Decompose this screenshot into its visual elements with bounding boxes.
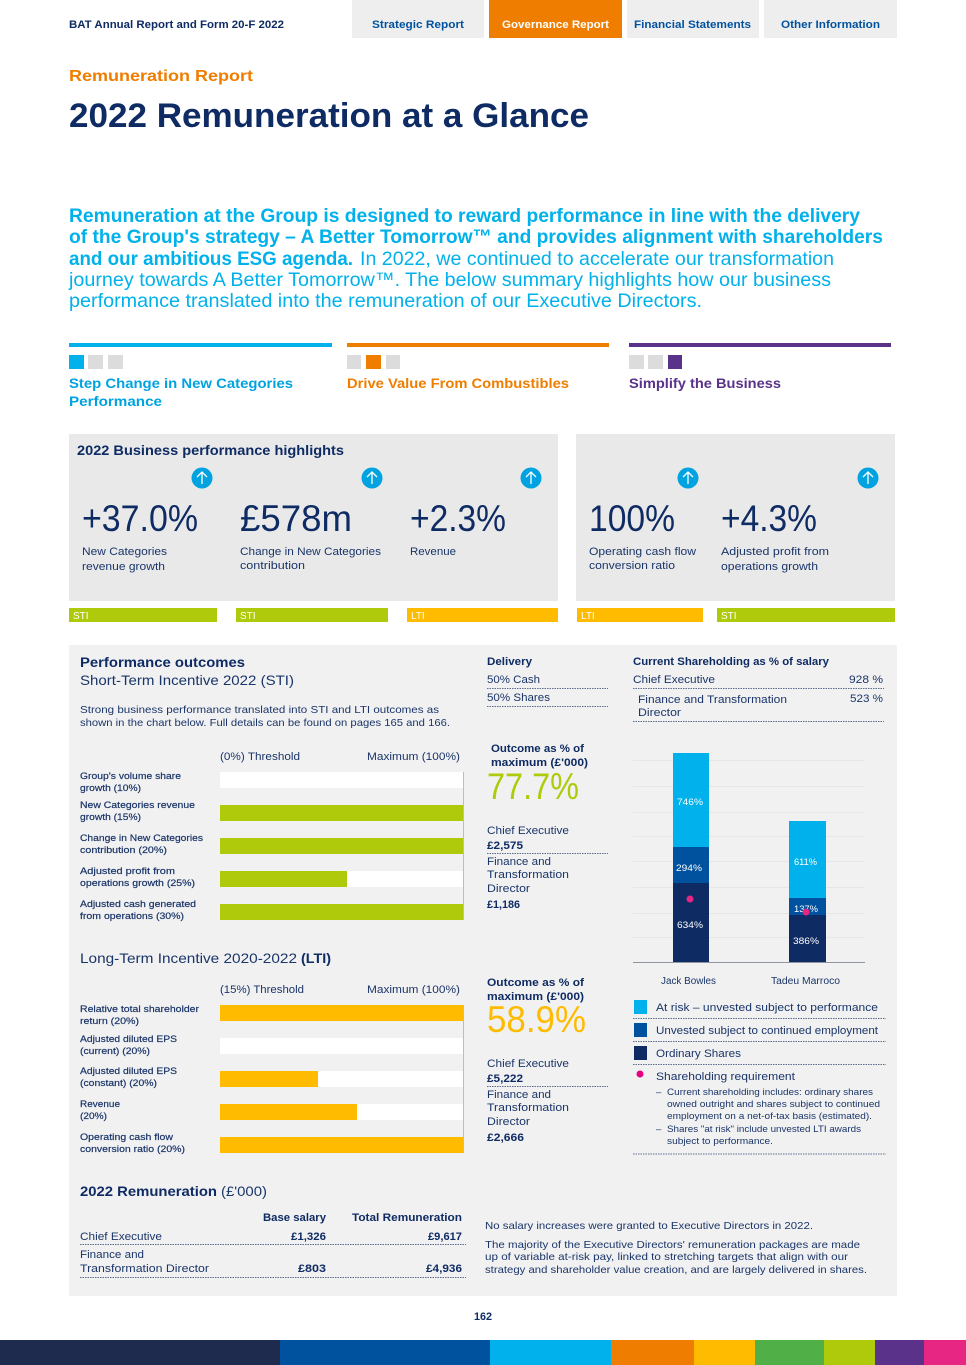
bar chart: LTI outcomes: (constant) (20%) — [80, 1078, 157, 1089]
remuneration table: Transformation Director — [80, 1263, 209, 1275]
KPI: new categories revenue growth: New Categories — [82, 546, 168, 558]
KPI: revenue — [410, 498, 506, 558]
STI outcome: maximum (£'000) — [491, 757, 588, 769]
KPI: cash conversion: Operating cash flow — [589, 546, 696, 558]
shareholding notes: employment on a net-of-tax basis (estimated). — [667, 1111, 872, 1122]
LTI outcome: 58.9% — [487, 999, 586, 1040]
remuneration table: Total Remuneration — [352, 1212, 462, 1224]
bar chart: LTI outcomes: (current) (20%) — [80, 1046, 150, 1057]
remuneration table: £1,326 — [291, 1231, 326, 1243]
bar chart: LTI outcomes: Adjusted diluted EPS — [80, 1034, 177, 1045]
bar chart: LTI outcomes: Relative total shareholder — [80, 1004, 199, 1015]
panel: business performance highlights: 2022 Business performance highlights — [77, 442, 344, 458]
bar chart: STI outcomes: Maximum (100%) — [367, 751, 460, 763]
page number: 162 — [474, 1311, 492, 1323]
KPI: cash conversion: 100% — [589, 498, 675, 539]
KPI: new categories revenue growth — [82, 498, 198, 573]
remuneration table: Base salary — [263, 1212, 327, 1224]
KPI: new categories contribution — [240, 498, 382, 572]
bar chart: STI outcomes: growth (15%) — [80, 812, 141, 823]
delivery split — [487, 656, 608, 706]
strategic pillar: combustibles: Drive Value From Combustibles — [347, 375, 569, 391]
STI outcome: £2,575 — [487, 840, 523, 852]
panel: cash and profit highlights — [576, 434, 895, 601]
bar chart: LTI outcomes: Adjusted diluted EPS — [80, 1066, 177, 1077]
title: 2022 Remuneration at a Glance — [69, 97, 589, 135]
current shareholding table: Current Shareholding as % of salary — [633, 656, 830, 668]
KPI: revenue: Revenue — [410, 546, 456, 558]
bar chart: LTI outcomes — [80, 984, 464, 1155]
text block: salary commentary: strategy and shareholder value creation, and are largely delivered in shares. — [485, 1264, 867, 1276]
bar chart: STI outcomes — [80, 751, 464, 922]
bar: Jack Bowles: 294% — [676, 863, 703, 874]
heading: performance outcomes: Short-Term Incentive 2022 (STI) — [80, 672, 294, 688]
LTI outcome — [487, 977, 608, 1144]
LTI outcome: £5,222 — [487, 1073, 523, 1085]
shareholding notes: subject to performance. — [667, 1136, 773, 1147]
current shareholding table: 928 % — [849, 674, 883, 686]
delivery split: Delivery — [487, 656, 533, 668]
text block: salary commentary: No salary increases were granted to Executive Directors in 2022. — [485, 1220, 813, 1232]
LTI outcome: Transformation — [487, 1102, 569, 1114]
heading: 2022 remuneration: (£'000) — [221, 1183, 267, 1199]
icon: up arrow — [520, 468, 542, 488]
bar: Jack Bowles: 746% — [677, 797, 704, 808]
STI outcome: Finance and — [487, 856, 551, 868]
strategic pillar: new categories: Step Change in New Categories — [69, 375, 293, 391]
bar: Tadeu Marroco: 611% — [794, 857, 818, 868]
remuneration table: Finance and — [80, 1249, 144, 1261]
STI outcome: £1,186 — [487, 899, 520, 911]
bar chart: STI outcomes: from operations (30%) — [80, 911, 184, 922]
bar: Tadeu Marroco: Tadeu Marroco — [771, 976, 840, 987]
intro text block: performance translated into the remuneration of our Executive Directors. — [69, 290, 702, 312]
bar chart: LTI outcomes: (15%) Threshold — [220, 984, 304, 996]
bar chart: LTI outcomes: return (20%) — [80, 1016, 139, 1027]
navigation tabs: Strategic Report — [372, 19, 464, 31]
shareholding notes: Shares "at risk" include unvested LTI awards — [667, 1124, 861, 1135]
chart legend — [633, 1000, 886, 1083]
current shareholding table: Finance and Transformation — [638, 694, 787, 706]
chart legend: Ordinary Shares — [656, 1048, 742, 1060]
incentive tags: STI — [721, 611, 737, 622]
STI outcome: 77.7% — [487, 766, 579, 807]
chart legend: Shareholding requirement — [656, 1071, 795, 1083]
current shareholding table: 523 % — [850, 693, 883, 705]
bar chart: STI outcomes: Change in New Categories — [80, 833, 203, 844]
heading: performance outcomes — [80, 655, 294, 688]
footer colour band — [0, 1340, 966, 1365]
text block: salary commentary: up of variable at-risk pay, linked to stretching targets that align with our — [485, 1251, 849, 1263]
strategic pillar: simplify — [629, 343, 891, 391]
KPI: revenue: +2.3% — [410, 498, 506, 539]
delivery split: 50% Cash — [487, 674, 540, 686]
incentive tags — [69, 608, 895, 622]
KPI: new categories contribution: contribution — [240, 560, 305, 572]
bar chart: LTI outcomes: Maximum (100%) — [367, 984, 460, 996]
text block: salary commentary — [485, 1220, 867, 1276]
bar chart: STI outcomes: growth (10%) — [80, 783, 141, 794]
navigation tabs: Financial Statements — [634, 19, 751, 31]
bar chart: STI outcomes: Adjusted profit from — [80, 866, 175, 877]
shareholding notes: – — [656, 1087, 662, 1098]
LTI outcome: Chief Executive — [487, 1058, 569, 1070]
KPI: new categories contribution: £578m — [240, 498, 352, 539]
bar chart: STI outcomes: New Categories revenue — [80, 800, 195, 811]
navigation tabs — [352, 0, 897, 38]
bar: Jack Bowles: 634% — [677, 920, 704, 931]
heading: 2022 remuneration — [80, 1183, 267, 1199]
bar: Tadeu Marroco: 137% — [794, 904, 819, 915]
navigation tabs: Governance Report — [502, 19, 609, 31]
strategic pillar: combustibles — [347, 343, 609, 391]
intro text block: Remuneration at the Group is designed to reward performance in line with the delivery — [69, 205, 860, 227]
panel: business performance highlights — [69, 434, 558, 601]
shareholding notes: Current shareholding includes: ordinary shares — [667, 1087, 873, 1098]
intro text block — [68, 205, 883, 312]
bar chart: STI outcomes: (0%) Threshold — [220, 751, 300, 763]
bar: Tadeu Marroco — [771, 821, 840, 987]
bar chart: LTI outcomes: conversion ratio (20%) — [80, 1144, 185, 1155]
STI outcome: Director — [487, 883, 530, 895]
bar chart: STI outcomes: contribution (20%) — [80, 845, 167, 856]
STI outcome — [487, 743, 608, 911]
KPI: adjusted profit growth: operations growth — [721, 561, 818, 573]
incentive tags: LTI — [411, 611, 425, 622]
KPI: cash conversion — [589, 498, 696, 572]
current shareholding table — [633, 656, 884, 722]
strategic pillar: new categories — [69, 343, 332, 409]
remuneration table: £4,936 — [426, 1263, 462, 1275]
text block: salary commentary: The majority of the Executive Directors' remuneration packages are made — [485, 1239, 860, 1251]
bar: Tadeu Marroco: 386% — [793, 936, 820, 947]
KPI: adjusted profit growth: +4.3% — [721, 498, 817, 539]
LTI outcome: £2,666 — [487, 1132, 524, 1144]
icon: up arrow — [362, 468, 382, 488]
intro text block: of the Group's strategy – A Better Tomorrow™ and provides alignment with shareholders — [69, 226, 883, 248]
KPI: adjusted profit growth: Adjusted profit from — [721, 546, 829, 558]
bar chart: LTI outcomes: (20%) — [80, 1111, 107, 1122]
text block: performance summary — [80, 704, 450, 729]
current shareholding table: Chief Executive — [633, 674, 715, 686]
heading: long-term incentive: (LTI) — [301, 950, 331, 966]
delivery split: 50% Shares — [487, 692, 551, 704]
KPI: new categories revenue growth: +37.0% — [82, 498, 198, 539]
text block: performance summary: Strong business performance translated into STI and LTI outcomes as — [80, 704, 439, 716]
STI outcome: Transformation — [487, 869, 569, 881]
bar: Jack Bowles: Jack Bowles — [661, 976, 716, 987]
bar chart: STI outcomes: Group's volume share — [80, 771, 181, 782]
incentive tags: STI — [73, 611, 89, 622]
icon: up arrow — [192, 468, 212, 488]
KPI: adjusted profit growth — [721, 498, 829, 573]
bar chart: STI outcomes: operations growth (25%) — [80, 878, 195, 889]
heading: 2022 remuneration: 2022 Remuneration — [80, 1183, 217, 1199]
stacked bar chart: shareholding — [633, 753, 865, 987]
strategic pillar: simplify: Simplify the Business — [629, 375, 781, 391]
remuneration table: Chief Executive — [80, 1231, 162, 1243]
incentive tags: STI — [240, 611, 256, 622]
KPI: cash conversion: conversion ratio — [589, 560, 675, 572]
chart legend: Unvested subject to continued employment — [656, 1025, 878, 1037]
KPI: new categories revenue growth: revenue growth — [82, 561, 165, 573]
LTI outcome: Finance and — [487, 1089, 551, 1101]
current shareholding table: Director — [638, 707, 681, 719]
heading: long-term incentive: Long-Term Incentive 2020-2022 — [80, 950, 297, 966]
icon: up arrow — [858, 468, 878, 488]
report name: BAT Annual Report and Form 20-F 2022 — [69, 19, 284, 31]
intro text block: journey towards A Better Tomorrow™. The below summary highlights how our business — [68, 269, 831, 291]
KPI: new categories contribution: Change in New Categories — [240, 546, 382, 558]
panel: performance outcomes — [69, 645, 897, 1296]
intro text block: and our ambitious ESG agenda. — [69, 248, 353, 270]
STI outcome: Outcome as % of — [491, 743, 584, 755]
remuneration table — [80, 1212, 466, 1278]
LTI outcome: Director — [487, 1116, 530, 1128]
bar chart: LTI outcomes: Operating cash flow — [80, 1132, 173, 1143]
navigation tabs: Other Information — [781, 19, 880, 31]
LTI outcome: Outcome as % of — [487, 977, 584, 989]
STI outcome: Chief Executive — [487, 825, 569, 837]
LTI outcome: maximum (£'000) — [487, 991, 584, 1003]
bar: Jack Bowles — [661, 753, 716, 987]
shareholding notes: owned outright and shares subject to continued — [667, 1099, 880, 1110]
strategic pillar: new categories: Performance — [69, 393, 162, 409]
bar chart: LTI outcomes: Revenue — [80, 1099, 120, 1110]
intro text block: In 2022, we continued to accelerate our transformation — [360, 248, 834, 270]
remuneration table: £803 — [298, 1263, 326, 1275]
bar chart: STI outcomes: Adjusted cash generated — [80, 899, 196, 910]
text block: performance summary: shown in the chart below. Full details can be found on pages 165 and 166. — [80, 717, 450, 729]
section label: Remuneration Report — [69, 68, 254, 85]
shareholding notes — [633, 1087, 886, 1154]
chart legend: At risk – unvested subject to performance — [656, 1002, 878, 1014]
remuneration table: £9,617 — [428, 1231, 462, 1243]
incentive tags: LTI — [581, 611, 595, 622]
icon: up arrow — [678, 468, 698, 488]
heading: performance outcomes: Performance outcomes — [80, 655, 245, 670]
shareholding notes: – — [656, 1124, 662, 1135]
